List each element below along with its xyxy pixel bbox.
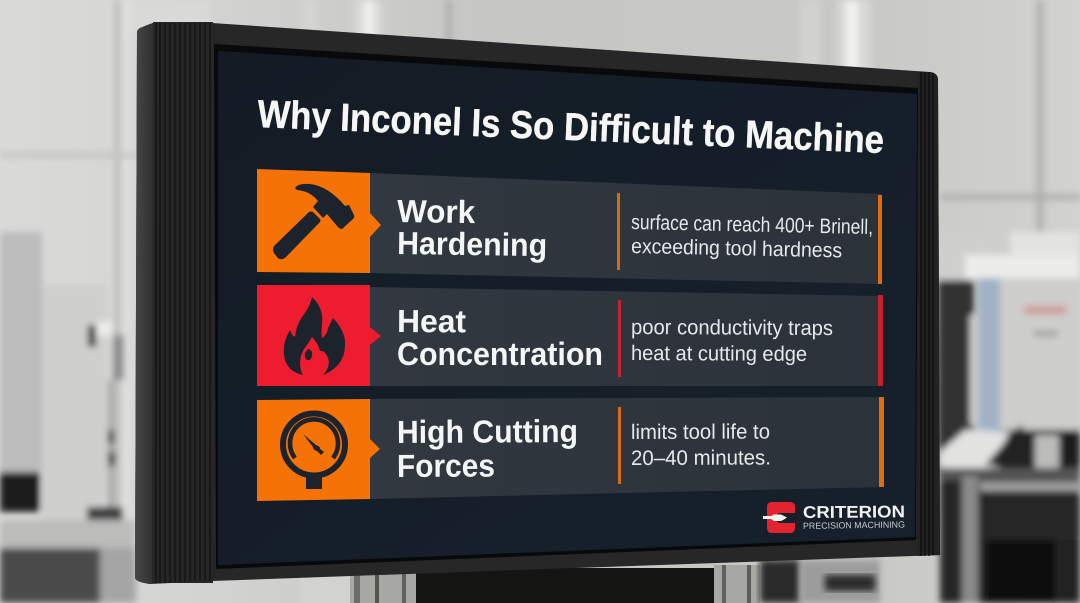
- description: [631, 211, 873, 262]
- icon: hammer: [273, 184, 354, 259]
- icon: flame: [284, 297, 345, 375]
- heading: high cutting forces: High Cutting: [397, 413, 578, 450]
- right accent: [878, 195, 882, 284]
- description: surface can reach 400+ Brinell,: [631, 211, 873, 239]
- heading: high cutting forces: Forces: [397, 447, 495, 484]
- icon box: orange: [257, 399, 380, 501]
- title: Why Inconel Is So Difficult to Machine: [257, 93, 885, 162]
- left ribbed edge: [153, 22, 213, 583]
- left side face: [135, 23, 153, 584]
- description: [631, 421, 771, 470]
- description: poor conductivity traps: [631, 316, 833, 340]
- logo wordmark: CRITERION: [803, 502, 905, 522]
- icon box: red: [257, 285, 381, 386]
- monitor frame: [135, 22, 940, 584]
- right accent: [878, 295, 883, 386]
- description: [631, 316, 833, 366]
- description: exceeding tool hardness: [631, 235, 842, 262]
- heading: heat concentration: Concentration: [397, 336, 603, 372]
- screen panel: [218, 51, 917, 565]
- description: limits tool life to: [631, 421, 770, 444]
- divider accent: [617, 193, 620, 270]
- icon: gauge: [283, 414, 345, 489]
- row 1: work hardening: [257, 169, 882, 284]
- row 2: heat concentration: [257, 285, 883, 386]
- stand posts: [300, 560, 880, 603]
- logo: criterion: [763, 502, 905, 533]
- right ribbed edge: [917, 72, 940, 556]
- icon box: orange: [257, 169, 381, 273]
- heading: work hardening: Work: [397, 193, 476, 230]
- divider accent: [618, 300, 621, 377]
- description: 20–40 minutes.: [631, 447, 771, 470]
- description: heat at cutting edge: [631, 342, 807, 366]
- logo tagline: PRECISION MACHINING: [803, 520, 905, 531]
- heading: work hardening: [397, 193, 547, 263]
- heading: high cutting forces: [397, 413, 578, 484]
- heading: work hardening: Hardening: [397, 225, 547, 263]
- row 3: high cutting forces: [257, 397, 884, 501]
- heading: heat concentration: [397, 303, 603, 372]
- right accent: [879, 397, 884, 487]
- logo mark: [763, 502, 795, 533]
- screen bezel shadow: [214, 44, 918, 569]
- heading: heat concentration: Heat: [397, 303, 466, 339]
- divider accent: [618, 407, 621, 484]
